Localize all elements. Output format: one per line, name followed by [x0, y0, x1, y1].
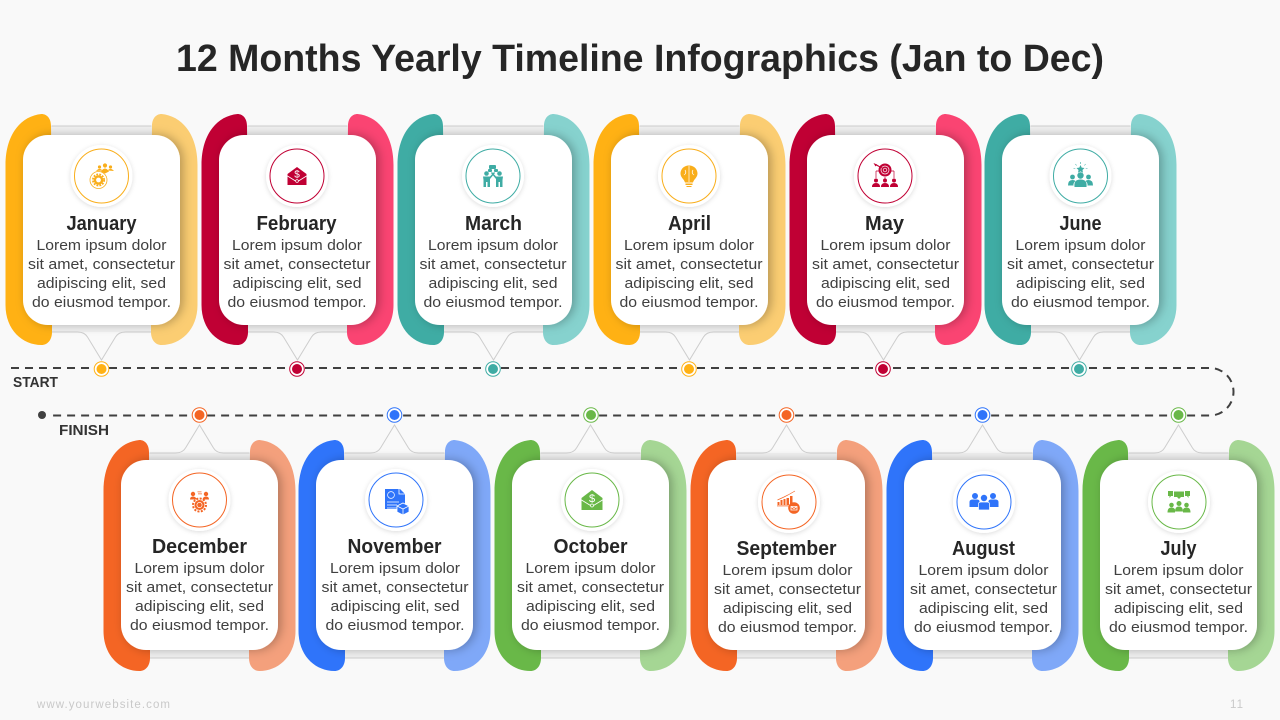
body text: adipiscing elit, sed: [526, 599, 655, 615]
connector: [736, 425, 838, 658]
timeline dot: [975, 408, 990, 422]
body text: sit amet, consectetur: [910, 582, 1057, 598]
icon: target and team: [854, 145, 916, 207]
body text: sit amet, consectetur: [1105, 582, 1252, 598]
body text: adipiscing elit, sed: [330, 599, 460, 615]
right bar: [1032, 440, 1078, 671]
panel: May: [790, 114, 982, 376]
body text: do eiusmod tempor.: [1011, 295, 1150, 311]
body text: do eiusmod tempor.: [1109, 620, 1248, 636]
right bar: [935, 114, 982, 345]
month heading: January: [66, 213, 137, 235]
card: [611, 135, 768, 325]
left bar: [494, 440, 541, 671]
left bar: [594, 114, 640, 345]
panel: June: [984, 114, 1176, 376]
month heading: May: [865, 213, 905, 235]
body text: sit amet, consectetur: [1007, 257, 1154, 273]
start label: START: [13, 375, 58, 391]
panel: July: [1082, 408, 1274, 671]
body text: do eiusmod tempor.: [914, 620, 1053, 636]
body text: [322, 561, 469, 634]
card: [219, 135, 376, 325]
body text: adipiscing elit, sed: [723, 601, 852, 617]
body text: sit amet, consectetur: [224, 257, 371, 273]
month heading: December: [152, 536, 247, 558]
left bar: [104, 440, 150, 671]
body text: [1105, 563, 1252, 636]
card: [904, 460, 1061, 650]
icon: money envelope: $: [589, 493, 595, 505]
body text: do eiusmod tempor.: [326, 618, 464, 634]
panel: December: [104, 408, 296, 671]
panel: November: [298, 408, 490, 671]
card: [512, 460, 669, 650]
icon: team and speech bubbles: [1148, 471, 1210, 533]
left bar: [6, 114, 52, 345]
connector: [1030, 126, 1132, 360]
body text: Lorem ipsum dolor: [722, 563, 853, 579]
body text: [812, 238, 959, 311]
right bar: [1228, 440, 1274, 671]
body text: [714, 563, 861, 636]
body text: [517, 561, 664, 634]
body text: sit amet, consectetur: [126, 580, 273, 596]
body text: adipiscing elit, sed: [37, 276, 166, 292]
icon: money envelope: $: [294, 170, 300, 180]
body text: [126, 561, 273, 634]
left bar: [790, 114, 836, 345]
card: [708, 460, 865, 650]
timeline dot: [779, 408, 794, 422]
body text: sit amet, consectetur: [28, 257, 175, 273]
body text: Lorem ipsum dolor: [1016, 238, 1146, 254]
icon: two people talking: [462, 145, 524, 207]
right bar: [347, 114, 394, 345]
timeline dashed path: [11, 368, 1234, 416]
card: [415, 135, 572, 325]
connector: [246, 126, 348, 360]
body text: adipiscing elit, sed: [1114, 601, 1243, 617]
body text: [224, 238, 371, 311]
body text: adipiscing elit, sed: [1016, 276, 1145, 292]
body text: sit amet, consectetur: [322, 580, 469, 596]
body text: Lorem ipsum dolor: [1114, 563, 1244, 579]
connector: [344, 425, 446, 658]
month heading: August: [952, 538, 1015, 560]
icon: money envelope: [266, 145, 328, 207]
body text: adipiscing elit, sed: [428, 276, 558, 292]
left bar: [984, 114, 1031, 345]
page number: 11: [1230, 699, 1243, 711]
connector: [1128, 425, 1230, 658]
right bar: [640, 440, 686, 671]
body text: sit amet, consectetur: [517, 580, 664, 596]
body text: sit amet, consectetur: [420, 257, 567, 273]
body text: Lorem ipsum dolor: [526, 561, 656, 577]
body text: do eiusmod tempor.: [816, 295, 955, 311]
body text: Lorem ipsum dolor: [428, 238, 558, 254]
card: [23, 135, 180, 325]
month heading: October: [554, 536, 628, 558]
body text: Lorem ipsum dolor: [134, 561, 265, 577]
body text: Lorem ipsum dolor: [330, 561, 460, 577]
right bar: [836, 440, 882, 671]
card: [1100, 460, 1257, 650]
icon: light bulb: [658, 145, 720, 207]
connector: [442, 126, 544, 360]
connector: [50, 126, 152, 360]
connector: [148, 425, 250, 658]
timeline dot: [682, 362, 696, 376]
body text: Lorem ipsum dolor: [36, 238, 167, 254]
title: 12 Months Yearly Timeline Infographics (Jan to Dec): [176, 38, 1104, 80]
icon: growth chart and badge: [758, 471, 820, 533]
connector: [540, 425, 642, 658]
body text: do eiusmod tempor.: [718, 620, 857, 636]
body text: [28, 238, 175, 311]
timeline dot: [290, 362, 304, 376]
connector: [638, 126, 740, 360]
icon: team of three: [953, 471, 1015, 533]
left bar: [298, 440, 345, 671]
body text: sit amet, consectetur: [714, 582, 861, 598]
body text: adipiscing elit, sed: [135, 599, 264, 615]
right bar: [151, 114, 198, 345]
right bar: [543, 114, 590, 345]
timeline dot: [584, 408, 598, 422]
timeline dot: [192, 408, 207, 422]
card: [807, 135, 964, 325]
body text: do eiusmod tempor.: [228, 295, 366, 311]
card: [316, 460, 473, 650]
finish marker: [38, 411, 46, 419]
connector: [932, 425, 1034, 658]
body text: [616, 238, 763, 311]
month heading: November: [348, 536, 442, 558]
body text: Lorem ipsum dolor: [232, 238, 362, 254]
right bar: [739, 114, 786, 345]
right bar: [1130, 114, 1176, 345]
timeline dot: [486, 362, 500, 376]
connector: [834, 126, 936, 360]
body text: Lorem ipsum dolor: [624, 238, 754, 254]
body text: sit amet, consectetur: [616, 257, 763, 273]
panel: February: [202, 114, 394, 376]
month heading: June: [1060, 213, 1102, 235]
panel: October: [494, 408, 686, 671]
body text: [1007, 238, 1154, 311]
body text: adipiscing elit, sed: [624, 276, 754, 292]
timeline dot: [387, 408, 402, 422]
left bar: [202, 114, 248, 345]
icon: team with star: [1050, 145, 1112, 207]
icon: people and gear: [168, 469, 230, 531]
body text: do eiusmod tempor.: [620, 295, 758, 311]
month heading: September: [736, 538, 837, 560]
body text: Lorem ipsum dolor: [820, 238, 951, 254]
timeline dot: [1171, 408, 1186, 422]
right bar: [249, 440, 296, 671]
body text: do eiusmod tempor.: [130, 618, 269, 634]
month heading: February: [256, 213, 337, 235]
footer website: www.yourwebsite.com: [36, 699, 170, 711]
panel: April: [594, 114, 786, 376]
card: [121, 460, 278, 650]
body text: adipiscing elit, sed: [232, 276, 362, 292]
panel: August: [886, 408, 1078, 671]
icon: document and box: [365, 469, 427, 531]
left bar: [1082, 440, 1129, 671]
icon: money envelope: [561, 469, 623, 531]
panel: January: [6, 114, 198, 376]
panel: September: [690, 408, 882, 671]
right bar: [444, 440, 490, 671]
timeline dot: [94, 362, 109, 376]
body text: do eiusmod tempor.: [424, 295, 562, 311]
body text: [420, 238, 567, 311]
card: [1002, 135, 1159, 325]
timeline dot: [1072, 362, 1086, 376]
month heading: July: [1160, 538, 1197, 560]
body text: adipiscing elit, sed: [821, 276, 950, 292]
panel: March: [398, 114, 590, 376]
timeline dot: [876, 362, 890, 376]
finish label: FINISH: [59, 423, 109, 439]
left bar: [690, 440, 737, 671]
body text: do eiusmod tempor.: [521, 618, 660, 634]
body text: do eiusmod tempor.: [32, 295, 171, 311]
body text: adipiscing elit, sed: [919, 601, 1048, 617]
body text: Lorem ipsum dolor: [918, 563, 1049, 579]
body text: sit amet, consectetur: [812, 257, 959, 273]
month heading: April: [668, 213, 711, 235]
body text: [910, 563, 1057, 636]
left bar: [398, 114, 444, 345]
left bar: [886, 440, 933, 671]
icon: team and gear: [70, 145, 132, 207]
month heading: March: [465, 213, 522, 235]
